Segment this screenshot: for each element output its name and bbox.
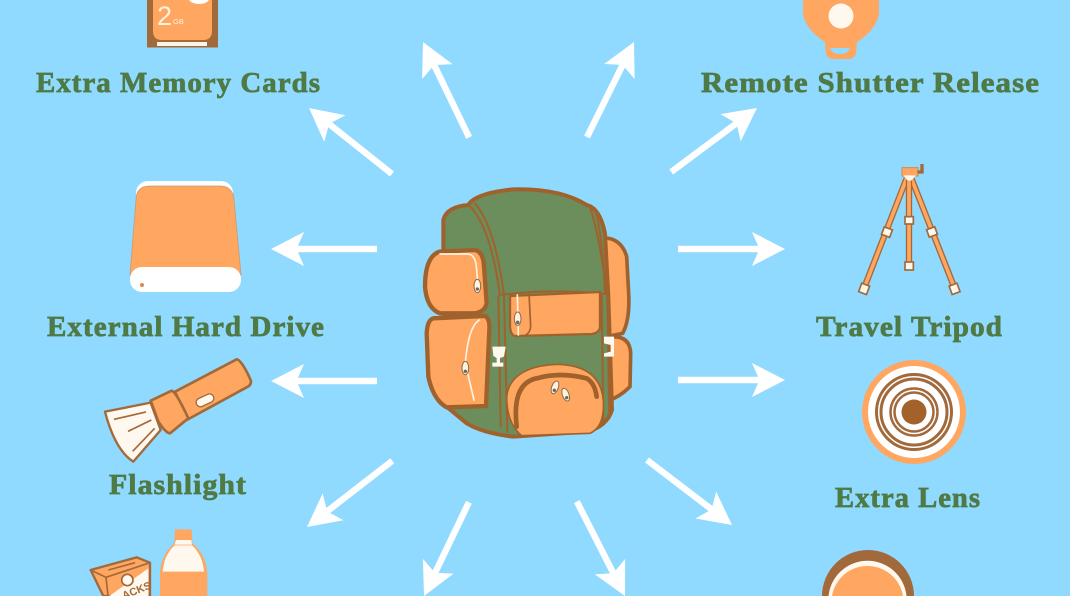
arrow: to memory cards: [298, 95, 403, 187]
right rear pockets: [603, 238, 631, 401]
label: Travel Tripod: Travel Tripod: [816, 311, 1003, 343]
icon: extra lens: [862, 360, 966, 464]
icon: memory card: GB: [173, 17, 184, 26]
icon: snacks box and water bottle: [91, 529, 207, 596]
arrow: to tripod: [678, 232, 785, 266]
zippers: [440, 254, 518, 400]
lower left side pocket: [427, 316, 489, 407]
label: Extra Lens: Extra Lens: [835, 482, 981, 514]
icon: remote shutter release: [803, 0, 879, 59]
icon: travel tripod: [859, 164, 960, 295]
strap buckles: [492, 337, 614, 367]
icon: external hard drive: [130, 181, 241, 292]
arrow: to snacks: [297, 447, 403, 540]
arrow: up right: [572, 34, 649, 145]
label: Extra Memory Cards: Extra Memory Cards: [36, 67, 321, 99]
arrow: up left: [408, 35, 484, 145]
label: Remote Shutter Release: Remote Shutter Release: [701, 67, 1040, 99]
arrow: to extra lens: [678, 363, 785, 397]
main green body: [443, 189, 612, 437]
bottle: [160, 529, 207, 596]
icon: lens filter: [822, 550, 914, 596]
arrow: to flashlight: [271, 364, 377, 398]
icon: memory card: [147, 0, 218, 48]
front pocket: [507, 364, 603, 436]
icon: central backpack: [425, 189, 631, 437]
upper left side pocket: [425, 250, 487, 313]
arrow: to remote shutter: [661, 94, 767, 186]
icon: memory card: 2: [157, 1, 172, 31]
arrow: to lens filter: [637, 447, 742, 539]
arrows: twelve white arrows radiating from the backpack: [271, 34, 785, 596]
label: External Hard Drive: External Hard Drive: [47, 311, 325, 343]
icon: flashlight: [105, 359, 251, 462]
arrow: down left: [409, 495, 484, 596]
arrow: down right: [562, 494, 640, 596]
label: Flashlight: Flashlight: [109, 469, 247, 501]
arrow: to hard drive: [271, 232, 377, 266]
flap and straps: [468, 203, 609, 432]
middle pocket: [510, 292, 600, 336]
